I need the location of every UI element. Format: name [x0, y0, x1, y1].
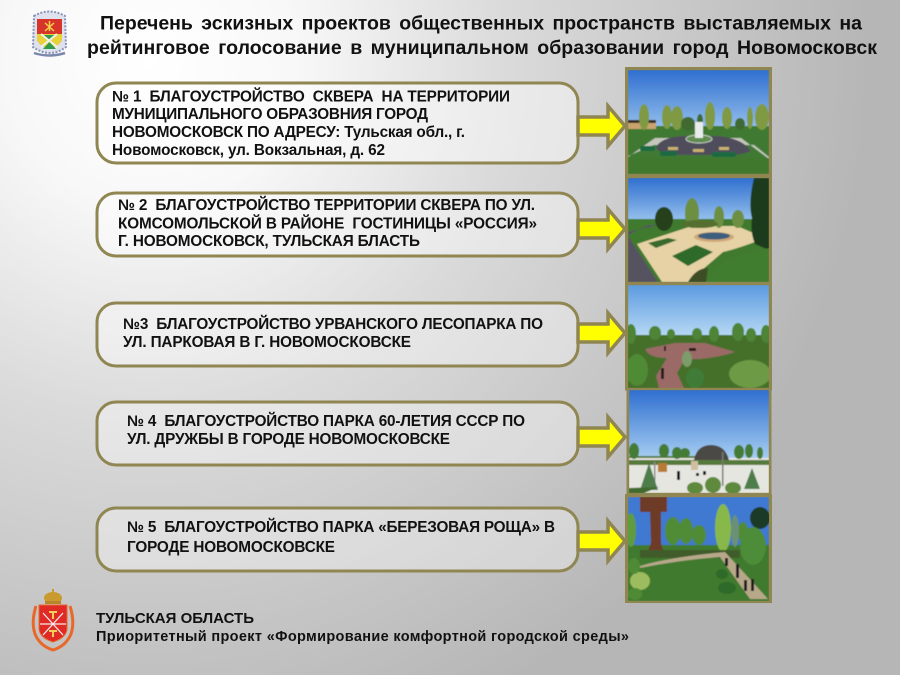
title — [87, 12, 877, 59]
panel: project 5: № 5 БЛАГОУСТРОЙСТВО ПАРКА «БЕРЕЗОВАЯ РОЩА» В — [127, 518, 555, 536]
title: Перечень эскизных проектов общественных пространств выставляемых на — [100, 12, 862, 34]
arrow: project 4 — [578, 417, 625, 457]
panel: project 2: № 2 БЛАГОУСТРОЙСТВО ТЕРРИТОРИИ СКВЕРА ПО УЛ. — [118, 196, 535, 214]
panel: project 3 — [97, 303, 578, 366]
image: scene 4 — [628, 389, 770, 494]
panel: project 5: ГОРОДЕ НОВОМОСКОВСКЕ — [127, 539, 335, 556]
panel: project 3: №3 БЛАГОУСТРОЙСТВО УРВАНСКОГО ЛЕСОПАРКА ПО — [123, 315, 543, 333]
panel: project 2 — [97, 193, 578, 256]
panel: project 2: КОМСОМОЛЬСКОЙ В РАЙОНЕ ГОСТИНИЦЫ «РОССИЯ» — [118, 214, 537, 232]
panel: project 3: УЛ. ПАРКОВАЯ В Г. НОВОМОСКОВСКЕ — [123, 334, 411, 351]
panel: project 5 — [97, 508, 578, 571]
panel: project 4: УЛ. ДРУЖБЫ В ГОРОДЕ НОВОМОСКОВСКЕ — [127, 431, 450, 448]
panel: project 2: Г. НОВОМОСКОВСК, ТУЛЬСКАЯ БЛАСТЬ — [118, 233, 420, 250]
panel: project 1: МУНИЦИПАЛЬНОГО ОБРАЗОВНИЯ ГОРОД — [112, 106, 428, 123]
panel: project 4: № 4 БЛАГОУСТРОЙСТВО ПАРКА 60-ЛЕТИЯ СССР ПО — [127, 412, 525, 430]
panel: project 4 — [97, 402, 578, 465]
image: scene 3 — [626, 284, 771, 389]
icon: Novomoskovsk coat of arms — [33, 12, 66, 56]
panel: project 1: Новомосковск, ул. Вокзальная, д. 62 — [112, 142, 385, 159]
icon: Tula region coat of arms — [33, 589, 73, 650]
panel: project 1: № 1 БЛАГОУСТРОЙСТВО СКВЕРА НА ТЕРРИТОРИИ — [112, 88, 510, 106]
title: рейтинговое голосование в муниципальном образовании город Новомосковск — [87, 37, 877, 59]
arrow: project 5 — [578, 521, 625, 561]
arrow: project 1 — [578, 106, 625, 146]
image: scene 1 — [626, 68, 770, 176]
footer text: ТУЛЬСКАЯ ОБЛАСТЬ — [96, 610, 254, 627]
arrow: project 2 — [578, 209, 625, 249]
panel: project 1 — [97, 83, 578, 163]
footer text — [96, 610, 629, 645]
panel: project 1: НОВОМОСКОВСК ПО АДРЕСУ: Тульская обл., г. — [112, 124, 465, 141]
arrow: project 3 — [578, 313, 625, 353]
footer text: Приоритетный проект «Формирование комфортной городской среды» — [96, 629, 629, 645]
image: scene 5 — [626, 496, 770, 602]
image: scene 2 — [626, 176, 770, 284]
